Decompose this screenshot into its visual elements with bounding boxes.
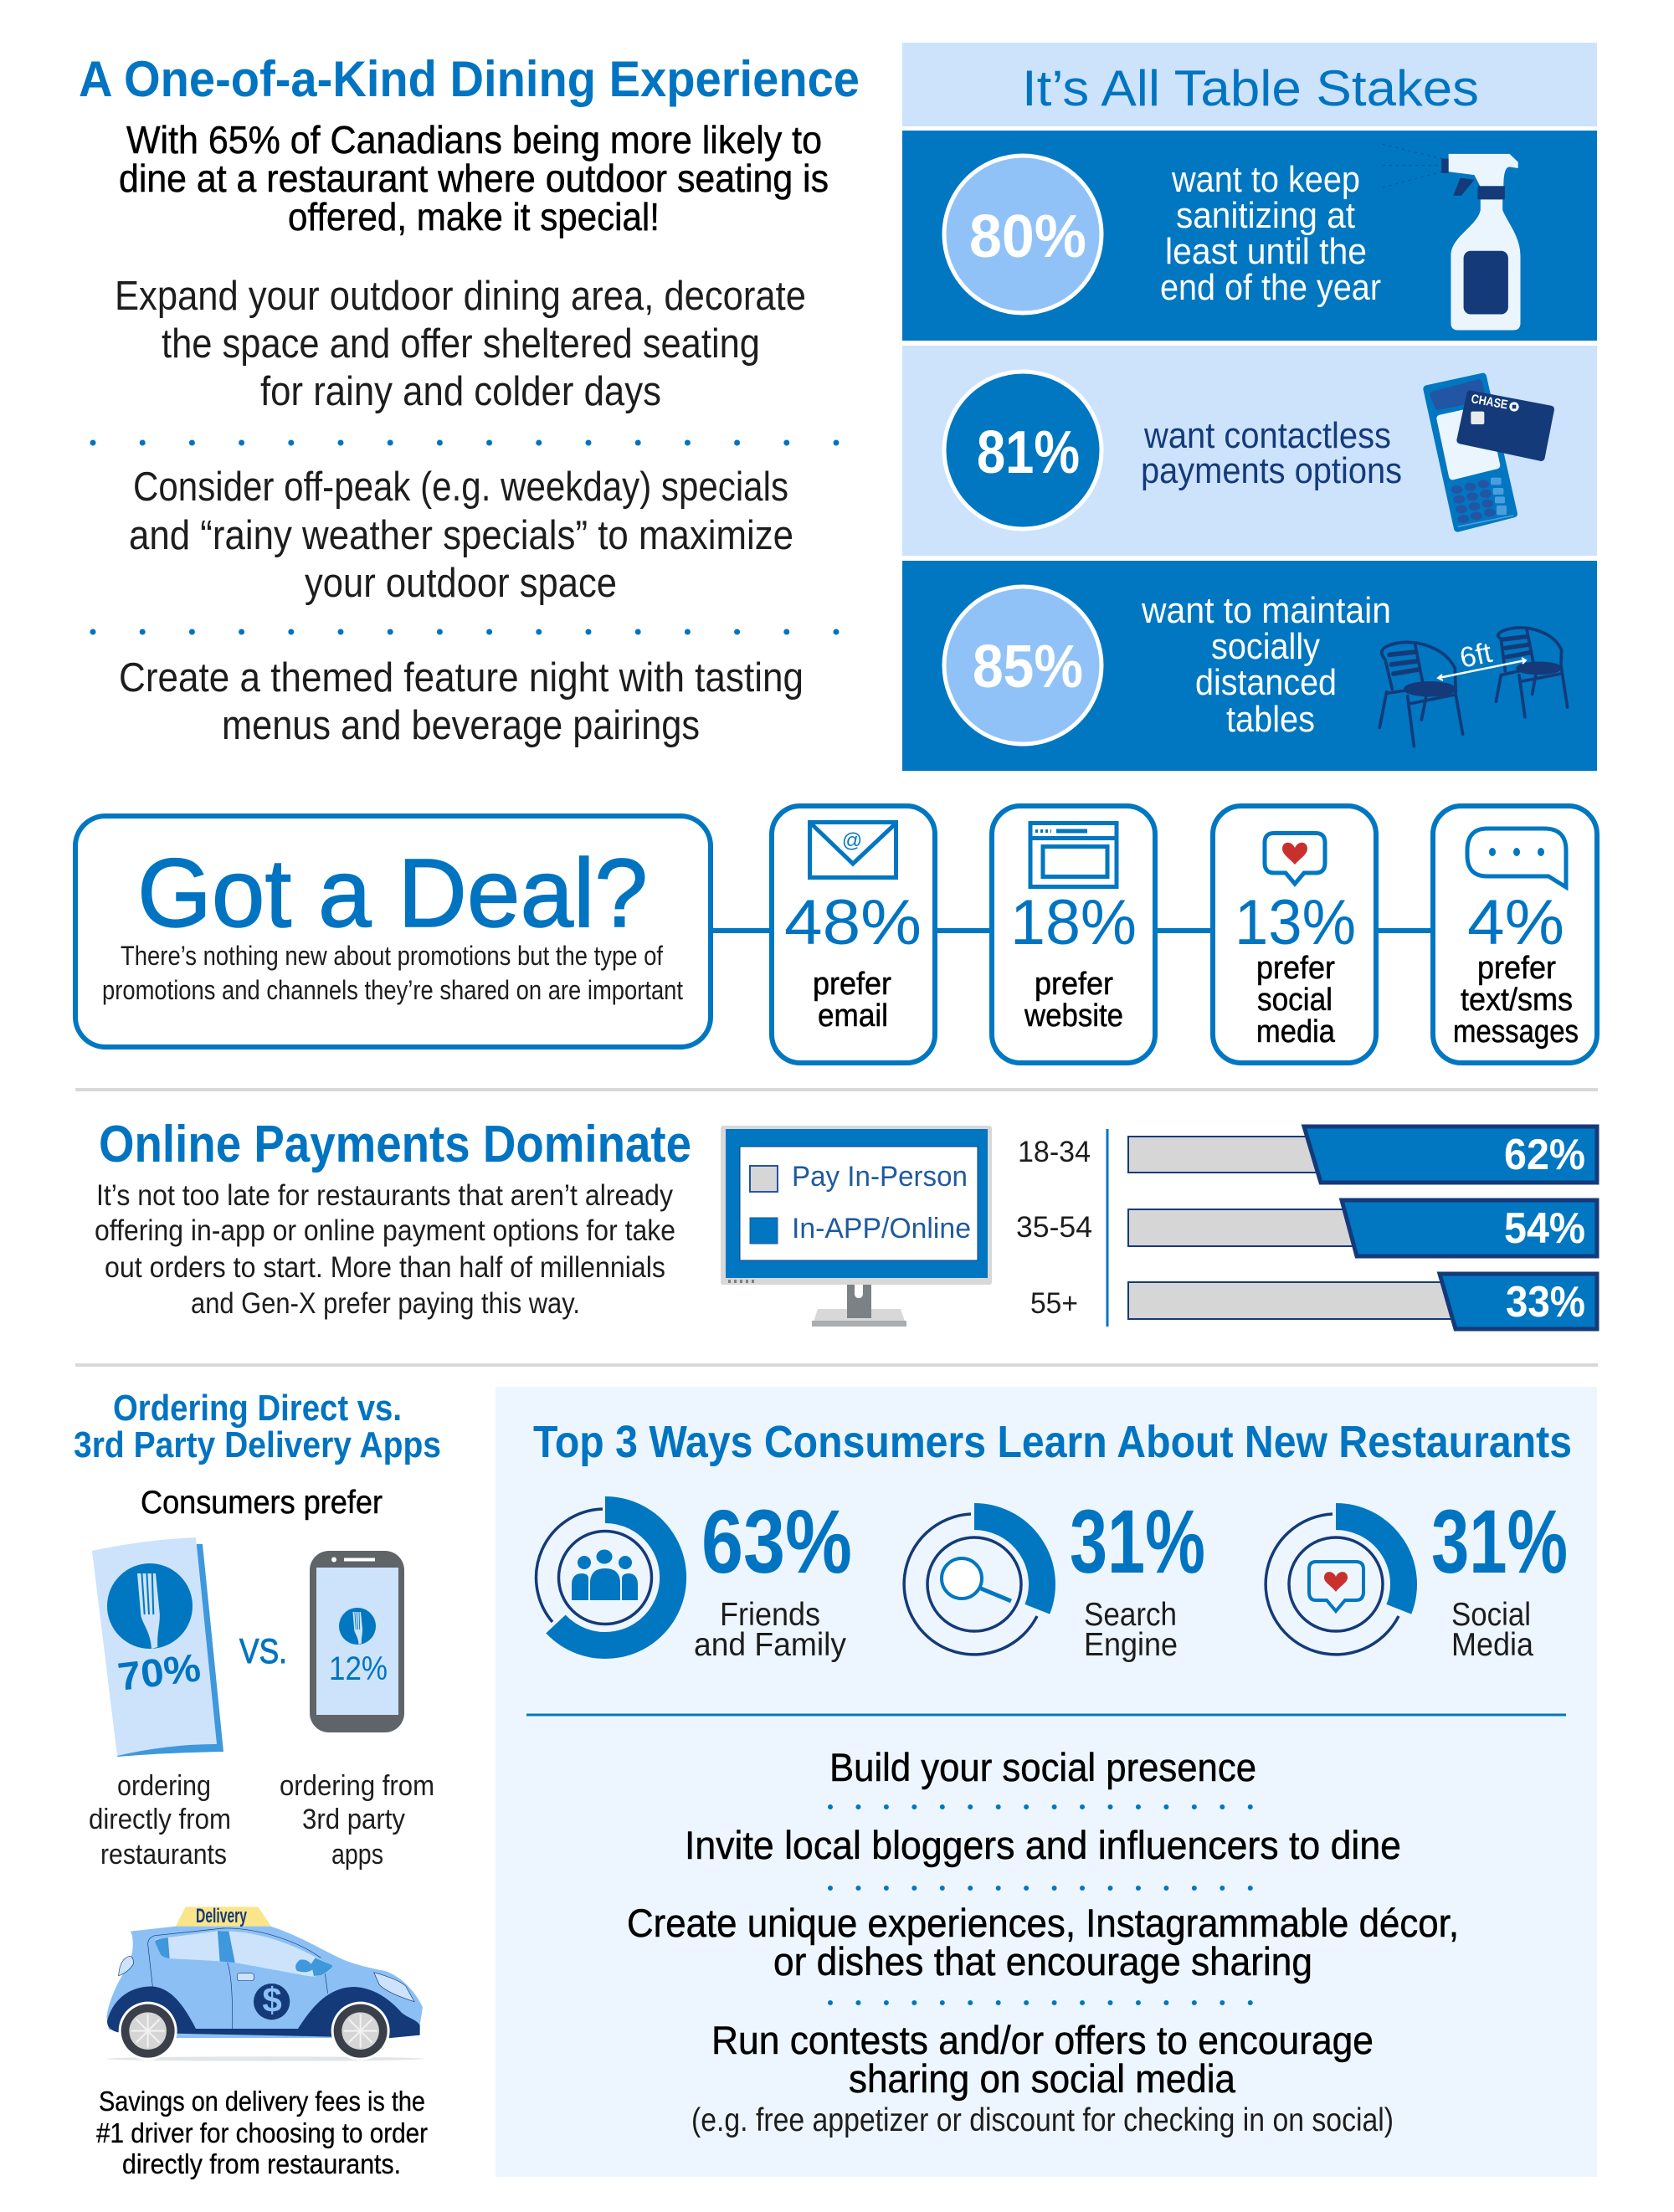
bar: 35-54 54%	[1016, 1200, 1597, 1256]
panel: it's all table stakes	[902, 43, 1597, 771]
text block: intro: offered, make it special!	[288, 195, 660, 239]
bar: 35-54 54%: 54%	[1504, 1204, 1585, 1253]
bar: 55+ 33%: 55+	[1030, 1287, 1078, 1320]
stat circle: 80%: 80%	[969, 203, 1086, 270]
text block: run contests: Run contests and/or offers to encourage	[711, 2018, 1374, 2062]
text: prefer text/sms messages: prefer	[1477, 951, 1556, 986]
text block: expand outdoor area: the space and offer sheltered seating	[162, 321, 760, 367]
text: prefer text/sms messages	[1453, 951, 1579, 1050]
text: prefer email: email	[818, 998, 888, 1034]
text block: themed feature night	[119, 655, 804, 748]
stat: 31%: 31%	[1431, 1491, 1568, 1592]
text: prefer website	[1024, 967, 1123, 1034]
text block: promotions: There’s nothing new about promotions but the type of	[121, 941, 663, 971]
text: savings on delivery fees: #1 driver for choosing to order	[96, 2117, 428, 2148]
icon: delivery car: $	[262, 1980, 282, 2020]
heading: dining experience: A One-of-a-Kind Dining Experience	[79, 51, 860, 107]
bar: 55+ 33%: 33%	[1506, 1278, 1585, 1327]
text: contactless payments: want contactless	[1143, 415, 1391, 456]
text: socially distanced tables: distanced	[1195, 662, 1337, 703]
text block: promotions	[102, 941, 683, 1005]
heading: top 3 ways: Top 3 Ways Consumers Learn About New Restaurants	[533, 1417, 1572, 1467]
stat circle: 80%	[944, 156, 1101, 313]
text: ordering directly: directly from	[89, 1804, 231, 1835]
bar: 18-34 62%: 62%	[1504, 1131, 1585, 1179]
icon: two chairs six feet apart	[1379, 628, 1568, 747]
card: 18% website	[992, 806, 1155, 1063]
label: search engine: Search	[1084, 1597, 1177, 1633]
stat: 4%: 4%	[1467, 887, 1564, 958]
label: search engine	[1084, 1597, 1178, 1663]
label: friends and family: and Family	[694, 1627, 846, 1663]
legend: pay in-person: Pay In-Person	[792, 1161, 968, 1193]
text: prefer social media	[1256, 951, 1336, 1050]
text: vs: VS.	[239, 1631, 287, 1671]
label: social media: Media	[1451, 1627, 1533, 1663]
stat circle: 81%: 81%	[977, 419, 1080, 486]
text: prefer text/sms messages: text/sms	[1461, 983, 1573, 1018]
stat: 48%: 48%	[784, 887, 922, 958]
text block: expand outdoor area: for rainy and colder days	[260, 369, 661, 414]
text block: expand outdoor area: Expand your outdoor dining area, decorate	[115, 274, 806, 319]
text block: online payments body: offering in-app or online payment options for take	[95, 1214, 675, 1247]
row: 81% contactless	[902, 346, 1597, 556]
text block: online payments body: out orders to start. More than half of millennials	[105, 1251, 665, 1284]
text: want to keep sanitizing: want to keep	[1171, 159, 1360, 200]
text: socially distanced tables: tables	[1226, 699, 1315, 740]
label: social media	[1451, 1597, 1533, 1663]
stat: 18%: 18%	[1010, 887, 1137, 958]
label: social media: Social	[1451, 1597, 1531, 1633]
icon: chat bubble	[1467, 829, 1566, 887]
text block: intro	[119, 118, 829, 239]
icon: heart speech bubble	[1265, 834, 1325, 884]
icon: magnifier	[942, 1558, 1011, 1601]
text: consumers prefer: Consumers prefer	[141, 1485, 383, 1521]
text block: online payments body: It’s not too late for restaurants that aren’t already	[96, 1179, 673, 1212]
text: prefer website: website	[1024, 998, 1123, 1034]
text: ordering directly: restaurants	[100, 1839, 227, 1871]
stat circle: 81%	[944, 372, 1101, 529]
text block: off-peak specials: Consider off-peak (e.g. weekday) specials	[133, 464, 788, 510]
icon: two chairs six feet apart: 6ft	[1457, 637, 1495, 675]
stat circle: 85%	[944, 587, 1101, 744]
panel: top 3 ways consumers learn	[496, 1387, 1597, 2177]
text block: unique experiences: Create unique experiences, Instagrammable décor,	[627, 1901, 1459, 1945]
icon: delivery car: Delivery	[196, 1905, 247, 1927]
text: prefer website: prefer	[1035, 967, 1113, 1002]
text: free appetizer note: (e.g. free appetizer or discount for checking in on social)	[691, 2102, 1394, 2138]
icon: spray bottle	[1383, 144, 1520, 330]
text block: unique experiences	[627, 1901, 1459, 1984]
text block: intro: dine at a restaurant where outdoor seating is	[119, 157, 829, 200]
label: search engine: Engine	[1084, 1627, 1178, 1663]
text: socially distanced tables: want to maintain	[1141, 590, 1391, 631]
text: ordering from apps: apps	[331, 1839, 383, 1871]
icon: envelope	[810, 822, 896, 877]
text block: off-peak specials	[129, 464, 793, 606]
panel: ordering direct vs third party	[74, 1388, 441, 2179]
text: want to keep sanitizing: sanitizing at	[1176, 195, 1355, 236]
heading: ordering direct: 3rd Party Delivery Apps	[74, 1424, 441, 1465]
row: 80% sanitizing	[902, 131, 1597, 341]
text: want to keep sanitizing	[1160, 159, 1381, 308]
text: ordering directly	[89, 1770, 231, 1871]
heading: table stakes: It’s All Table Stakes	[1022, 60, 1479, 116]
card: 4% text/sms	[1433, 806, 1597, 1063]
text: want to keep sanitizing: end of the year	[1160, 267, 1381, 308]
card: 13% social media	[1213, 806, 1376, 1063]
icon: browser window	[1030, 824, 1117, 887]
bar: 18-34 62%	[1018, 1127, 1597, 1183]
text block: promotions: promotions and channels they’re shared on are important	[102, 975, 683, 1005]
icon: payment terminal and card: CHASE	[1470, 392, 1509, 413]
text: socially distanced tables: socially	[1211, 626, 1320, 667]
icon: family	[572, 1550, 638, 1600]
icon: envelope: @	[842, 829, 862, 852]
icon: phone 12%: 12%	[329, 1650, 388, 1687]
text block: run contests	[711, 2018, 1374, 2101]
text: prefer social media: media	[1256, 1014, 1336, 1050]
icon: menu 70%: 70%	[116, 1645, 203, 1699]
text block: themed feature night: Create a themed feature night with tasting	[119, 655, 804, 701]
text: savings on delivery fees: Savings on delivery fees is the	[99, 2086, 425, 2117]
row: 85% distanced tables	[902, 561, 1597, 771]
donut: 31% search engine	[904, 1491, 1205, 1663]
text: prefer email: prefer	[813, 967, 891, 1002]
bar: 18-34 62%: 18-34	[1018, 1136, 1091, 1168]
text: ordering directly: ordering	[117, 1770, 211, 1802]
icon: menu 70%	[92, 1537, 223, 1757]
text block: off-peak specials: and “rainy weather specials” to maximize	[129, 513, 793, 558]
heading: online payments: Online Payments Dominate	[99, 1116, 691, 1173]
text block: online payments body: and Gen-X prefer paying this way.	[191, 1287, 580, 1320]
legend: in-app/online: In-APP/Online	[792, 1213, 971, 1245]
bar chart: payment preference by age	[1016, 1127, 1597, 1329]
text: savings on delivery fees: directly from restaurants.	[122, 2148, 401, 2179]
stat: 63%: 63%	[701, 1491, 852, 1592]
text: prefer text/sms messages: messages	[1453, 1014, 1579, 1050]
label: friends and family: Friends	[720, 1597, 820, 1633]
bar: 55+ 33%	[1030, 1274, 1597, 1329]
text block: invite bloggers: Invite local bloggers and influencers to dine	[685, 1823, 1401, 1867]
text: contactless payments: payments options	[1141, 450, 1402, 491]
text block: build social presence: Build your social presence	[829, 1745, 1256, 1789]
text block: online payments body	[95, 1179, 675, 1320]
bar: 35-54 54%: 35-54	[1016, 1211, 1092, 1244]
text block: off-peak specials: your outdoor space	[305, 561, 617, 606]
panel: online payments dominate	[95, 1116, 691, 1320]
icon: heart bubble	[1309, 1562, 1363, 1611]
panel: one-of-a-kind dining experience	[79, 51, 860, 748]
card: 48% email	[772, 806, 935, 1063]
text: socially distanced tables	[1141, 590, 1391, 740]
text: prefer social media: prefer	[1256, 951, 1335, 986]
donut: 63% friends and family	[537, 1491, 852, 1663]
text: contactless payments	[1141, 415, 1402, 491]
icon: delivery car	[106, 1905, 424, 2061]
icon: payment terminal and card	[1427, 377, 1551, 528]
text block: expand outdoor area	[115, 274, 806, 414]
heading: ordering direct	[74, 1388, 441, 1465]
donut: 31% social media	[526, 1491, 1568, 2138]
text: prefer social media: social	[1257, 983, 1333, 1018]
label: friends and family	[694, 1597, 846, 1663]
text block: themed feature night: menus and beverage pairings	[222, 703, 700, 748]
icon: monitor legend	[721, 1126, 992, 1327]
icon: phone 12%	[310, 1551, 404, 1732]
stat: 13%: 13%	[1235, 887, 1356, 958]
heading: got a deal: Got a Deal?	[137, 839, 648, 947]
text block: unique experiences: or dishes that encourage sharing	[773, 1939, 1312, 1984]
text block: run contests: sharing on social media	[849, 2056, 1236, 2101]
panel: got a deal	[75, 816, 711, 1047]
stat: 31%: 31%	[1070, 1491, 1205, 1592]
heading: ordering direct: Ordering Direct vs.	[113, 1388, 402, 1429]
text: ordering from apps	[280, 1770, 434, 1871]
text: ordering from apps: 3rd party	[302, 1804, 405, 1835]
text: savings on delivery fees	[96, 2086, 428, 2179]
text: want to keep sanitizing: least until the	[1165, 231, 1367, 272]
text block: intro: With 65% of Canadians being more likely to	[126, 118, 822, 162]
icon: fork	[137, 1572, 160, 1649]
text: prefer email	[813, 967, 891, 1034]
text: ordering from apps: ordering from	[280, 1770, 434, 1802]
stat circle: 85%: 85%	[973, 634, 1083, 701]
